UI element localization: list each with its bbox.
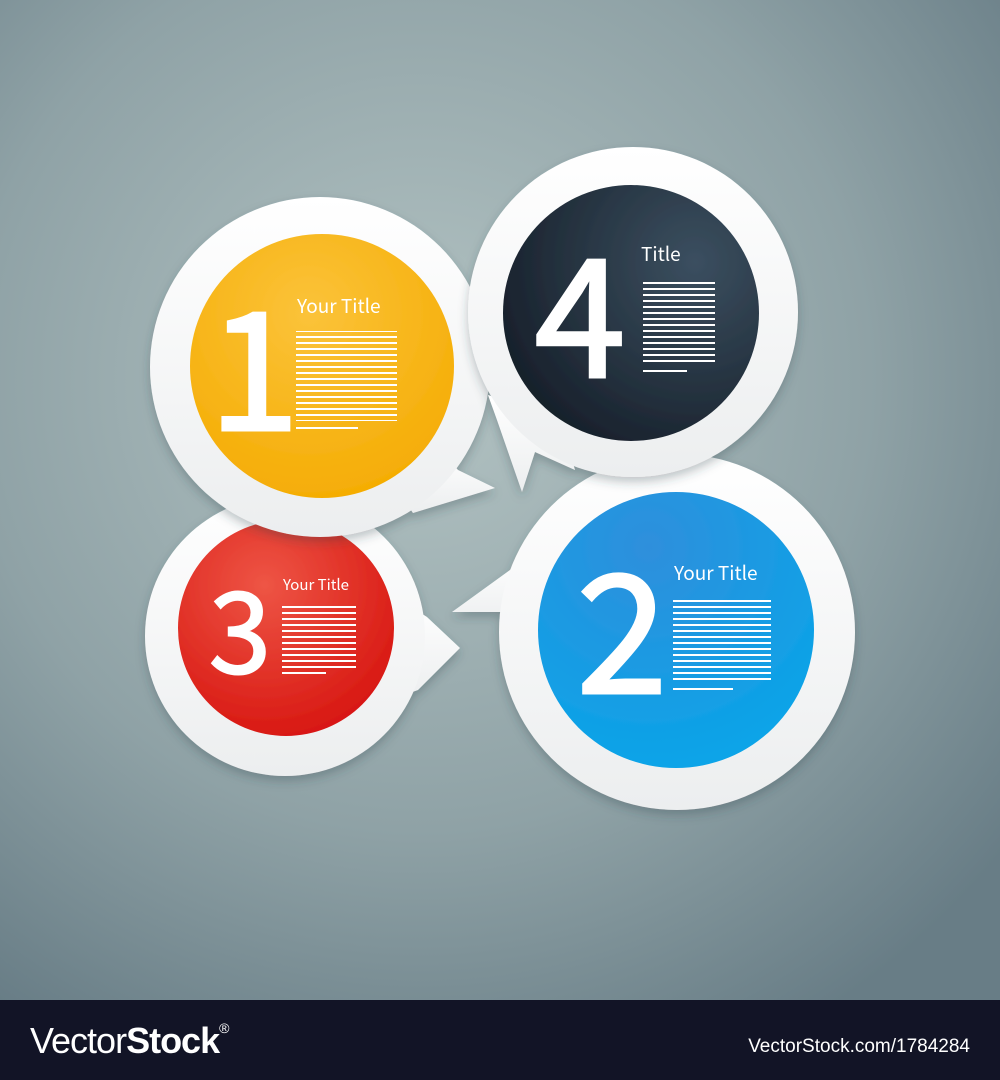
title 3: Your Title	[282, 574, 349, 595]
title 2: Your Title	[673, 559, 758, 586]
step 2 bubble	[452, 454, 855, 810]
text lines 4	[643, 278, 715, 372]
footer logo: ®	[219, 1020, 230, 1036]
title 1: Your Title	[296, 292, 381, 319]
step 4 bubble	[468, 147, 798, 492]
title 4: Title	[641, 240, 681, 267]
step 3 bubble	[145, 496, 460, 776]
number 4: 4	[534, 188, 626, 425]
footer url: VectorStock.com/1784284	[748, 1036, 970, 1057]
text lines 2	[673, 598, 771, 690]
step 1 bubble	[150, 197, 495, 537]
text lines 3	[282, 603, 356, 674]
footer bar	[0, 1000, 1000, 1080]
number 1: 1	[208, 241, 300, 478]
number 3: 3	[209, 544, 271, 706]
text lines 1	[296, 331, 397, 429]
footer logo: VectorStock	[30, 1020, 219, 1061]
number 2: 2	[576, 504, 668, 741]
